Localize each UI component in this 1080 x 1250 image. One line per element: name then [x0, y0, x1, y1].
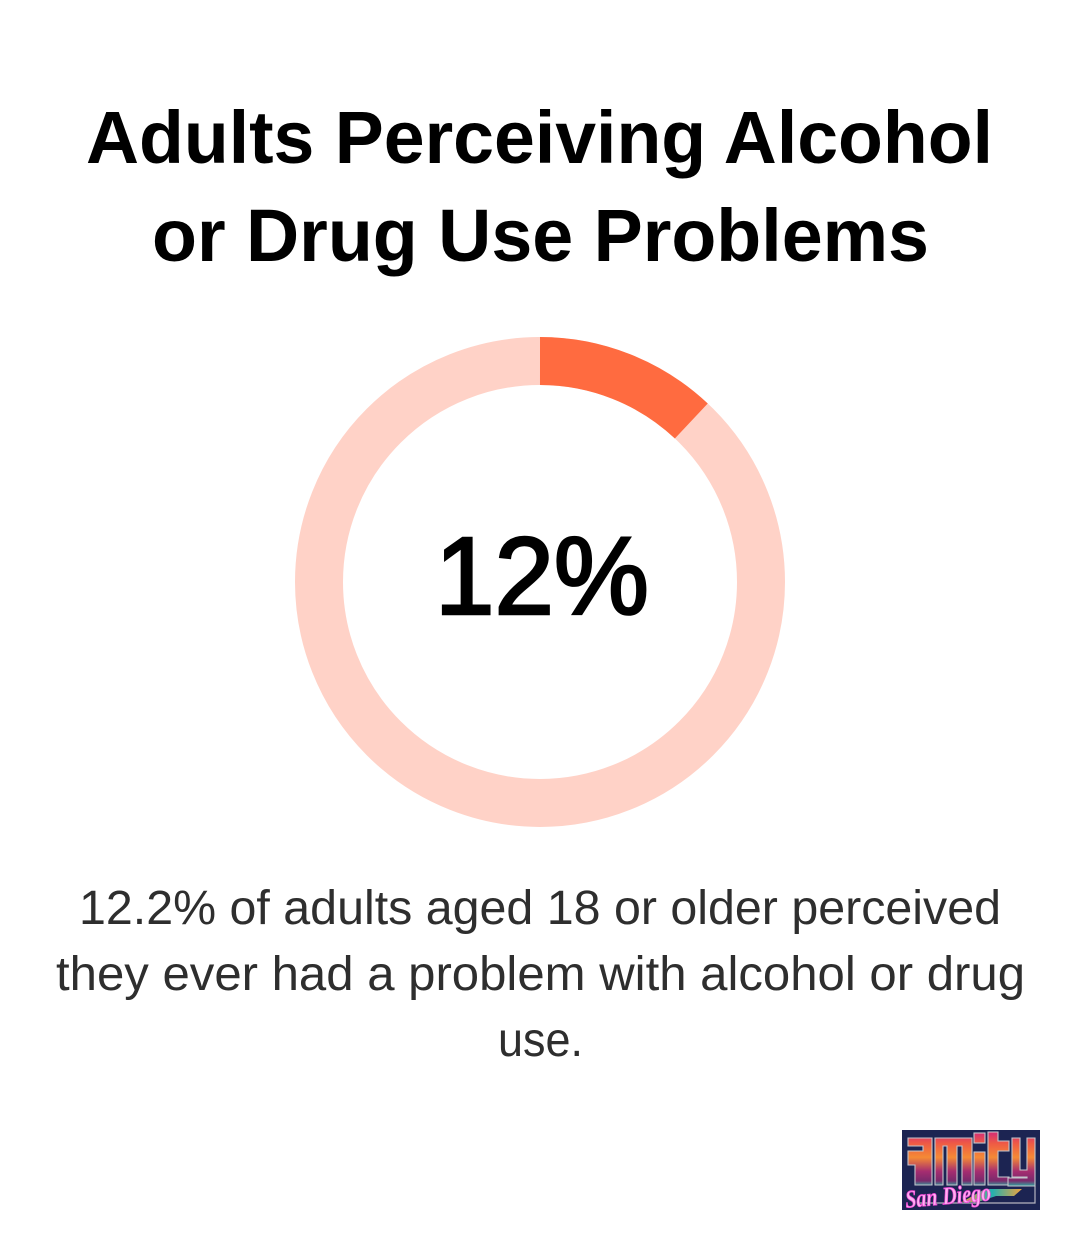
donut highlighted segment [540, 361, 691, 421]
title: or Drug Use Problems [152, 194, 929, 277]
description text: 12.2% of adults aged 18 or older perceived [79, 882, 1001, 935]
logo wordmark [908, 1132, 1035, 1186]
logo beach stripe [962, 1189, 1022, 1202]
center value: 12% [435, 515, 649, 638]
logo: Amity San Diego [902, 1130, 1040, 1214]
title: Adults Perceiving Alcohol [86, 96, 993, 179]
logo script text: San Diego [904, 1179, 992, 1214]
description text: they ever had a problem with alcohol or drug [56, 948, 1025, 1001]
logo frame [918, 1186, 1035, 1203]
donut track [319, 361, 761, 803]
logo background [902, 1130, 1040, 1210]
description text: use. [498, 1014, 583, 1067]
title [86, 96, 993, 277]
description text [56, 882, 1025, 1067]
donut chart: 12% [319, 361, 761, 803]
